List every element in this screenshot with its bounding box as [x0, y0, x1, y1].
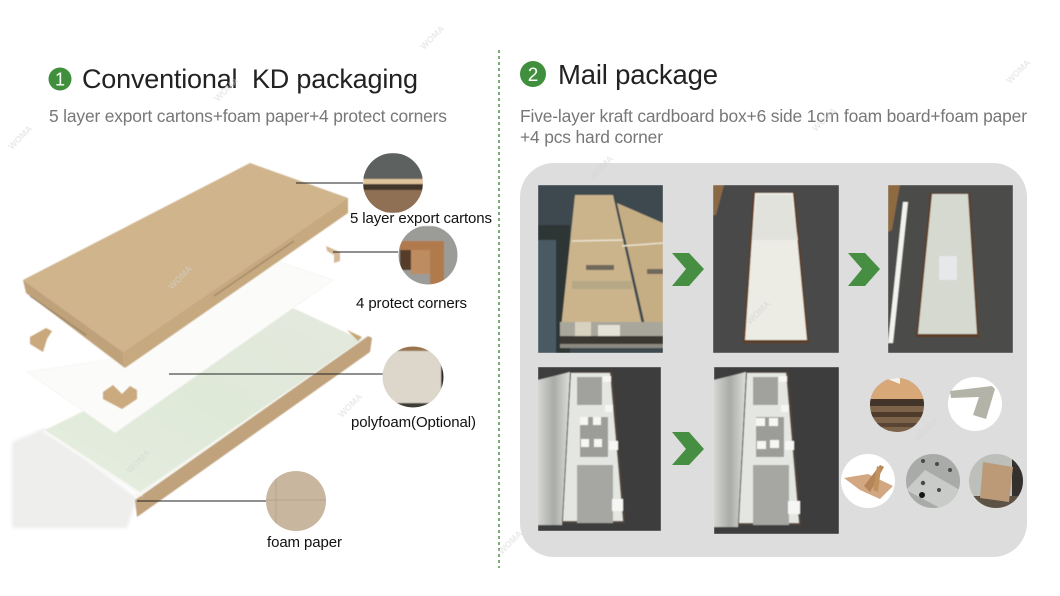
arrow 2	[848, 253, 880, 286]
callout: foam paper	[137, 471, 342, 551]
watermarks: WOMA	[124, 447, 153, 475]
photo: panel on floor	[713, 185, 839, 353]
section divider	[498, 50, 500, 568]
watermarks: WOMA	[212, 75, 241, 103]
title: conventional KD packaging: Conventional KD packaging	[82, 64, 418, 94]
title: mail package: Mail package	[558, 59, 718, 90]
callout: foam paper: foam paper	[267, 534, 342, 551]
callout: 5 layer export cartons: 5 layer export cartons	[350, 210, 492, 227]
watermarks: WOMA	[166, 263, 195, 291]
detail circle: corrugated cardboard	[870, 378, 924, 432]
right subtitle	[520, 106, 1027, 147]
detail circle: paper angle strips	[841, 454, 895, 508]
watermarks: WOMA	[1004, 57, 1033, 85]
panel: mail package steps	[520, 163, 1027, 557]
corner protector on foam	[103, 385, 137, 409]
callout: polyfoam	[169, 346, 476, 431]
watermarks: WOMA	[912, 415, 941, 443]
photo: cartons	[538, 185, 663, 353]
arrow 3	[672, 432, 704, 465]
plastic wrap	[12, 428, 137, 528]
photo: wrapped panel	[888, 185, 1013, 353]
detail circle: foam paper pad	[969, 454, 1023, 508]
corner protector left	[30, 328, 52, 352]
paper detail photo	[266, 471, 326, 531]
foam board sheet	[27, 256, 333, 433]
right subtitle: Five-layer kraft cardboard box+6 side 1cm foam board+foam paper	[520, 106, 1027, 126]
watermarks: WOMA	[587, 153, 616, 181]
photo: opened box closer	[714, 367, 839, 534]
number badge 2: 2	[528, 65, 538, 86]
photo: opened box with accessories	[538, 367, 661, 531]
watermarks: WOMA	[336, 391, 365, 419]
callout: 5 layer export cartons	[296, 153, 492, 227]
watermarks: WOMA	[418, 23, 447, 51]
watermarks: WOMA	[496, 528, 525, 556]
callout: polyfoam: polyfoam(Optional)	[351, 414, 476, 431]
right subtitle: +4 pcs hard corner	[520, 127, 663, 147]
watermarks: WOMA	[6, 123, 35, 151]
callout: 4 protect corners	[333, 226, 467, 312]
number badge 2	[520, 61, 546, 87]
panel with green film	[42, 308, 362, 497]
watermarks: WOMA	[744, 298, 773, 326]
cardboard tray	[135, 336, 372, 517]
exploded packaging diagram	[12, 163, 372, 528]
right section heading	[520, 59, 718, 90]
number badge 1: 1	[55, 70, 65, 90]
foam detail photo	[382, 346, 444, 408]
cardboard detail photo	[363, 153, 423, 213]
watermarks: WOMA	[810, 105, 839, 133]
left section heading	[48, 64, 418, 94]
corner detail photo	[398, 226, 458, 286]
detail circle: metal corner	[948, 377, 1002, 431]
outer carton	[23, 163, 348, 368]
arrow 1	[672, 253, 704, 286]
number badge 1	[48, 68, 72, 90]
corner protector top right	[326, 246, 340, 263]
callout: 4 protect corners: 4 protect corners	[356, 295, 467, 312]
left subtitle: 5 layer export cartons+foam paper+4 protect corners	[49, 106, 447, 126]
detail circle: screws on bag	[906, 454, 960, 508]
